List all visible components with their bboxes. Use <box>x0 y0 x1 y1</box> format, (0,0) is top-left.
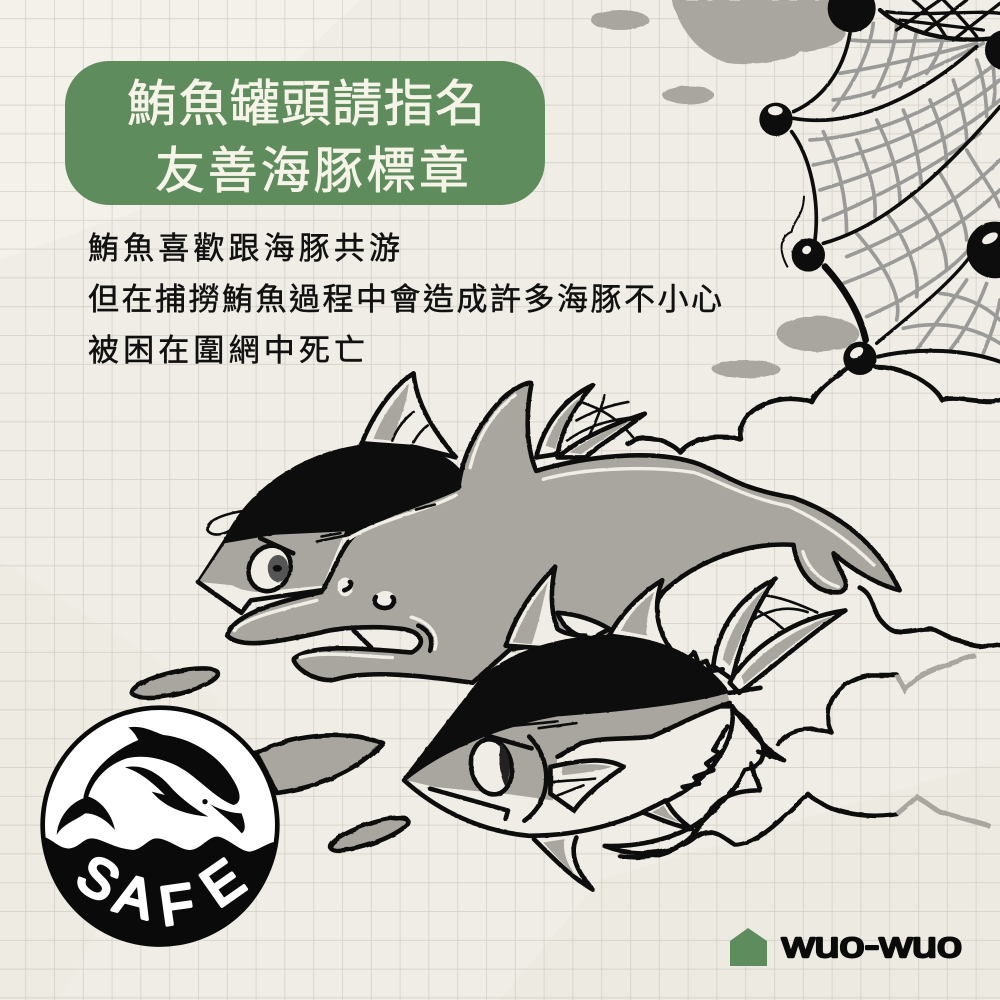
badge sea <box>42 837 277 947</box>
grey blobs background <box>591 0 859 378</box>
icon: fishing net <box>759 0 1000 375</box>
badge dolphin <box>57 727 245 835</box>
body text: 被困在圍網中死亡 <box>88 333 365 368</box>
title text: 友善海豚標章 <box>155 143 469 199</box>
badge: dolphin safe <box>42 708 277 947</box>
illustration: fish and dolphin <box>198 373 900 890</box>
tuna fins with net behind dolphin <box>536 385 645 457</box>
badge text SAFE: A <box>109 862 161 931</box>
badge text SAFE: S <box>66 842 130 914</box>
badge text SAFE <box>66 842 255 938</box>
body text: 但在捕撈鮪魚過程中會造成許多海豚不小心 <box>88 282 722 317</box>
badge text SAFE: E <box>190 847 255 919</box>
title panel <box>65 61 545 205</box>
logo: wuo-wuo <box>730 924 962 966</box>
net floats <box>759 0 1000 375</box>
icon: green house <box>730 928 767 966</box>
body text: 鮪魚喜歡跟海豚共游 <box>88 231 400 266</box>
body text <box>88 231 722 368</box>
title text: 鮪魚罐頭請指名 <box>127 76 485 132</box>
smoke cloud outlines <box>605 367 1000 857</box>
dolphin <box>227 383 900 683</box>
logo wordmark: wuo-wuo <box>781 924 962 965</box>
tuna left <box>198 373 458 613</box>
badge text SAFE: F <box>156 871 198 938</box>
tuna lower right <box>404 567 845 890</box>
title text <box>127 76 485 199</box>
grey ovals and fin near badge <box>130 662 411 857</box>
